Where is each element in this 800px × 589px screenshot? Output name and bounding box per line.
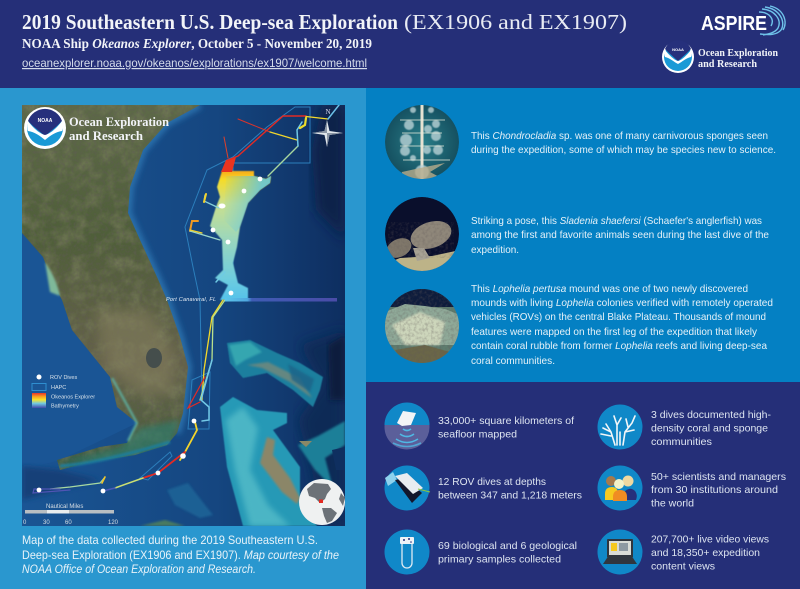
text: ROV dives: between 347 and 1,218 meters [438, 490, 582, 502]
text: Lophelia mound: mounds with living Lophelia colonies verified with remotely operated [471, 298, 773, 309]
icon: seafloor mapping [384, 402, 430, 450]
text: Lophelia mound [471, 284, 773, 367]
text: views [651, 534, 769, 572]
map legend: HAPC [51, 385, 66, 391]
text: Lophelia mound: contain coral rubble from former Lophelia reefs and living deep-sea [471, 341, 767, 352]
text: coral communities [651, 410, 771, 448]
compass: N [325, 108, 331, 116]
subtitle: NOAA Ship Okeanos Explorer, October 5 - November 20, 2019 [22, 37, 372, 52]
header Ocean Exploration wordmark: and Research [698, 58, 757, 70]
text: views: content views [651, 562, 715, 572]
map legend: Bathymetry [51, 404, 79, 410]
text: Chondrocladia [471, 131, 776, 156]
deep east water [312, 105, 345, 240]
map wordmark: Ocean Exploration [69, 115, 169, 129]
text: scientists: the world [651, 498, 694, 510]
HAPC outlines [140, 107, 310, 480]
text: scientists [651, 472, 786, 510]
text: Chondrocladia: during the expedition, some of which may be species new to science. [471, 145, 776, 156]
text: coral communities: density coral and sponge [651, 424, 768, 434]
title: 2019 Southeastern U.S. Deep-sea Exploration [22, 10, 398, 34]
header Ocean Exploration wordmark: Ocean Exploration [698, 47, 778, 59]
Bahama bank south [220, 397, 317, 526]
text: seafloor mapped [438, 416, 574, 440]
photo: anglerfish [383, 197, 460, 272]
coast shallows [45, 262, 60, 296]
header NOAA logo: NOAA [672, 47, 684, 52]
ASPIRE logo [701, 6, 785, 35]
gulf [90, 355, 135, 444]
compass [312, 108, 343, 147]
panel: statistics [366, 382, 800, 589]
survey lines [33, 105, 339, 493]
text: samples: primary samples collected [438, 554, 561, 566]
header NOAA logo [662, 40, 694, 73]
map legend: Okeanos Explorer [51, 394, 95, 400]
text: scientists: 50+ scientists and managers [651, 472, 786, 483]
Port Canaveral strip [225, 298, 337, 302]
text: views: 207,700+ live video views [651, 534, 769, 546]
bathymetry swath [210, 171, 271, 300]
map wordmark: and Research [69, 129, 143, 143]
panel: map [0, 88, 366, 589]
icon: people [598, 466, 642, 510]
Bahama bank north [227, 340, 323, 407]
icon: laptop [598, 530, 642, 574]
map caption: Deep-sea Exploration (EX1906 and EX1907). Map courtesy of the [22, 548, 339, 562]
expedition link: oceanexplorer.noaa.gov/okeanos/explorations/ex1907/welcome.html [22, 56, 367, 70]
NOAA logo on map [24, 107, 66, 149]
scale bar: 120 [108, 520, 119, 526]
photo: Chondrocladia sponge [385, 105, 459, 180]
text: anglerfish: Striking a pose, this Sladenia shaefersi (Schaefer's anglerfish) was [471, 216, 762, 227]
text: anglerfish [471, 216, 769, 256]
text: anglerfish: among the first and favorite animals seen during the last dive of the [471, 230, 769, 241]
text: views: and 18,350+ expedition [651, 548, 760, 559]
text: scientists: from 30 institutions around [651, 485, 778, 496]
panel: species photos [366, 88, 800, 382]
text: coral communities: 3 dives documented high- [651, 410, 771, 421]
text: samples [438, 541, 577, 566]
header band [0, 0, 800, 88]
map caption: Map of the data collected during the 2019 Southeastern U.S. [22, 533, 318, 547]
ROV dive dots [37, 177, 262, 493]
ASPIRE logo: ASPIRE [701, 13, 767, 35]
locator globe [299, 479, 345, 525]
title [22, 10, 627, 34]
map legend: ROV Dives [50, 375, 77, 381]
text: ROV dives: 12 ROV dives at depths [438, 477, 546, 488]
text: ROV dives [438, 477, 582, 502]
photo: Lophelia mound [385, 289, 460, 365]
icon: sample tube [384, 530, 430, 574]
text: Lophelia mound: This Lophelia pertusa mound was one of two newly discovered [471, 284, 748, 295]
text: Lophelia mound: coral communities. [471, 356, 555, 367]
header Ocean Exploration wordmark [698, 47, 778, 70]
scale bar: 0 [23, 520, 27, 526]
text: coral communities: communities [651, 437, 712, 448]
map wordmark [69, 117, 169, 140]
NOAA logo on map: NOAA [38, 118, 53, 124]
text: anglerfish: expedition. [471, 245, 519, 256]
map caption: NOAA Office of Ocean Exploration and Research. [22, 562, 256, 576]
scale bar: 30 [43, 520, 50, 526]
icon: ROV [384, 466, 430, 510]
land [22, 105, 202, 475]
scale bar: Nautical Miles [46, 504, 83, 510]
title: (EX1906 and EX1907) [404, 10, 627, 34]
text: samples: 69 biological and 6 geological [438, 541, 577, 552]
Cay Sal bank [167, 483, 213, 518]
text: Chondrocladia: This Chondrocladia sp. was one of many carnivorous sponges seen [471, 131, 768, 142]
text: Lophelia mound: vehicles (ROVs) on the central Blake Plateau. Thousands of mound [471, 312, 766, 323]
map legend [32, 374, 95, 410]
text: Lophelia mound: features were mapped on the first leg of the expedition that likely [471, 327, 758, 338]
coastal shelf [128, 105, 200, 433]
map caption [22, 533, 339, 576]
satellite map [22, 105, 345, 526]
scale bar [23, 504, 119, 526]
scale bar: 60 [65, 520, 72, 526]
Port Canaveral label: Port Canaveral, FL [166, 297, 216, 303]
text: seafloor mapped: seafloor mapped [438, 430, 517, 440]
text: seafloor mapped: 33,000+ square kilometers of [438, 416, 574, 427]
icon: coral [598, 404, 642, 450]
